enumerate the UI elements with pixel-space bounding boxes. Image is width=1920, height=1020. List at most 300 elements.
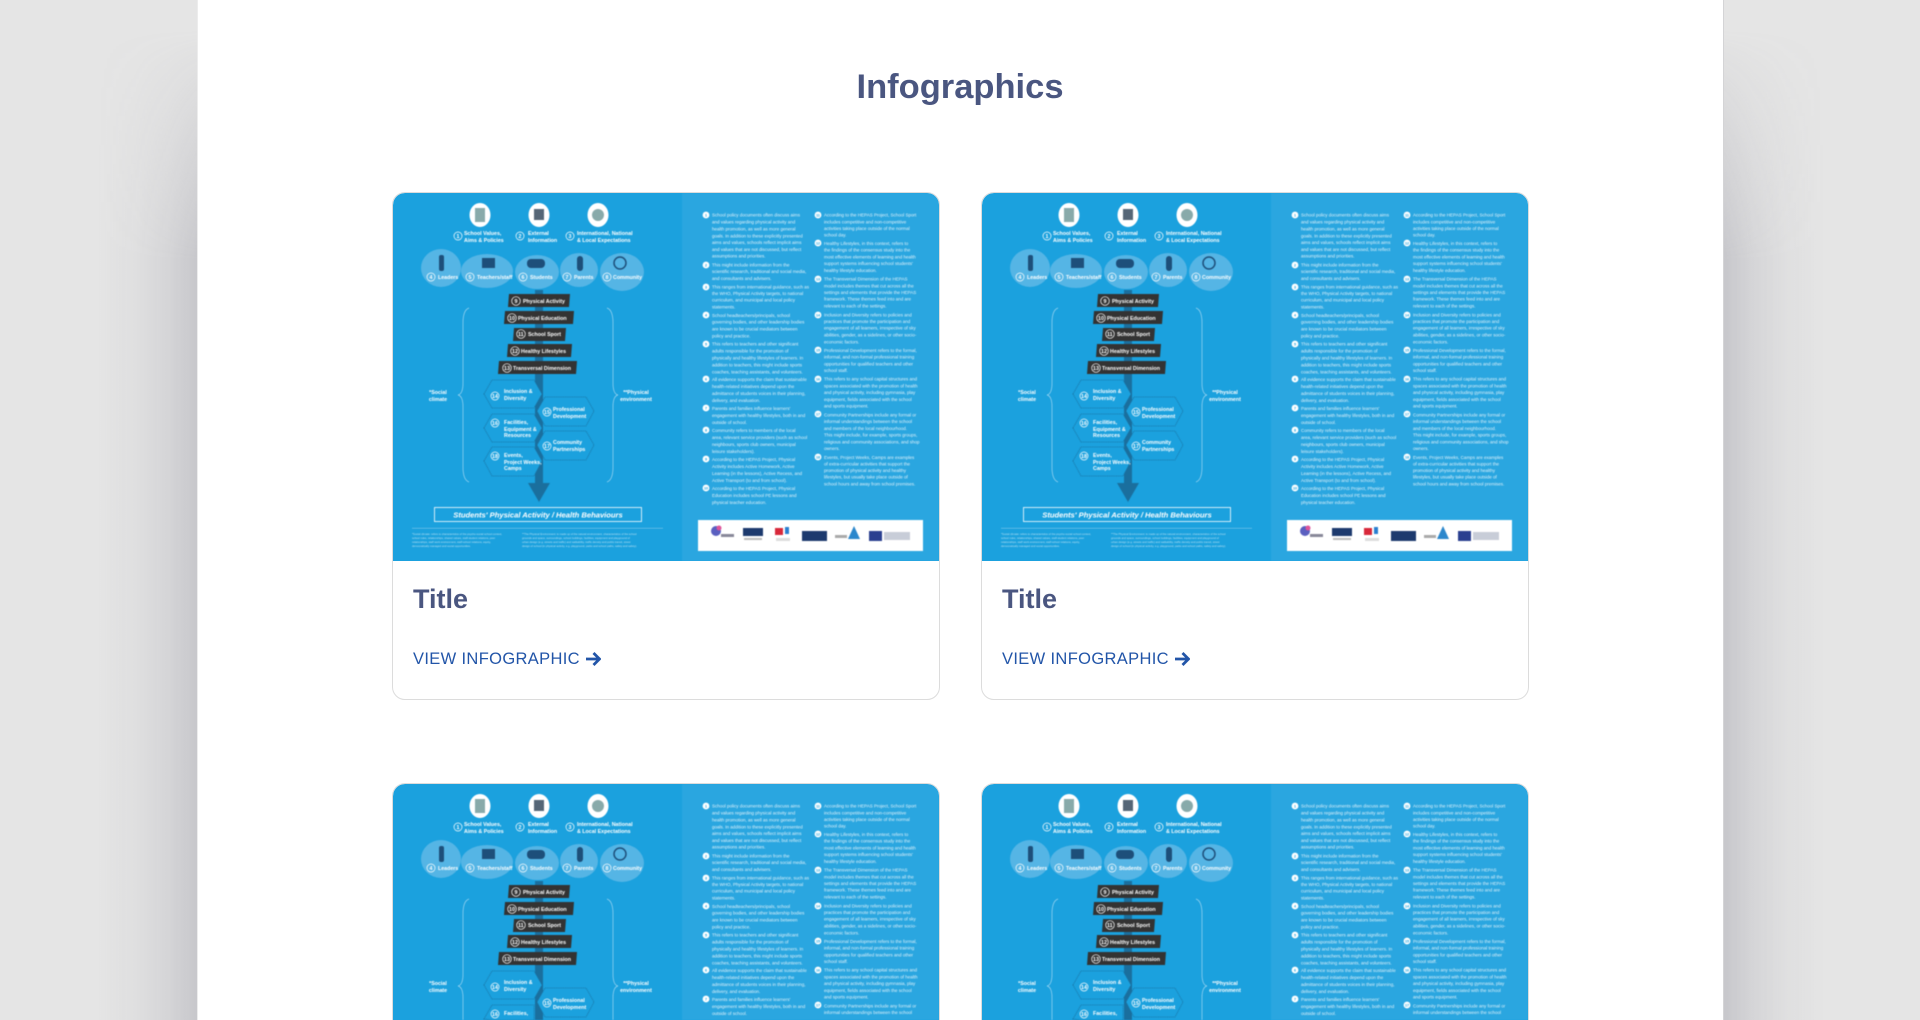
left page shadow [140, 88, 197, 1020]
infographic thumbnail: equipment, fields associated with the school [1413, 397, 1501, 402]
notes column 2: 16 [1405, 968, 1409, 972]
infographic thumbnail: of extra-curricular activities that support the [824, 461, 911, 466]
stakeholder blobs: Leaders [438, 866, 458, 872]
stakeholder blobs: Leaders [1027, 275, 1047, 281]
footnotes: relationships, staff work environment, staff-school relations, equity, [412, 540, 491, 544]
hexagons: Professional [1142, 998, 1174, 1004]
notes column 2: 14 [816, 313, 820, 317]
infographic thumbnail: relevant to each of the settings. [824, 304, 887, 309]
infographic thumbnail: The Transversal Dimension of the HEPAS [1413, 277, 1496, 282]
infographic thumbnail: The Transversal Dimension of the HEPAS [824, 277, 907, 282]
notes column 1: 8 [705, 428, 707, 432]
infographic thumbnail: and physical activity, including gymnasia, play [1413, 981, 1505, 986]
stakeholder blobs: Teachers/staff [1066, 866, 1102, 872]
infographic thumbnail: governing bodies, and other leadership bodies [712, 911, 805, 916]
infographic thumbnail: and values that are not discussed, but reflect [1301, 838, 1391, 843]
notes column 2: 11 [816, 213, 820, 217]
footnotes: **The Physical Environment: is made up of the natural environment, characteristics of the school [1111, 532, 1226, 536]
infographic thumbnail: statements. [1301, 896, 1324, 901]
hexagons [1073, 380, 1183, 476]
notes column 1: 2 [1294, 263, 1296, 267]
side labels and braces [429, 308, 652, 482]
infographic thumbnail: According to the HEPAS Project, Physical [1301, 486, 1384, 491]
footnotes: relationships, staff work environment, staff-school relations, equity, [1001, 540, 1080, 544]
infographic thumbnail: aims and values, schools reflect implicit aims [712, 240, 802, 245]
stakeholder blobs: 8 [1194, 866, 1198, 872]
top three factors: Information [1117, 829, 1146, 835]
hexagons: Development [1142, 414, 1175, 420]
notes column 2: 14 [1405, 313, 1409, 317]
infographic thumbnail: equipment, fields associated with the school [824, 988, 912, 993]
infographic thumbnail: abilities, gender, as a sidelines, or other socio- [824, 332, 917, 337]
hexagons: 18 [1081, 454, 1087, 460]
side labels and braces: environment [620, 397, 652, 403]
side labels and braces [429, 899, 652, 1020]
infographic thumbnail: practices that promote the participation and [824, 319, 911, 324]
hexagons: Diversity [1093, 396, 1115, 402]
notes column 2: 15 [816, 939, 820, 943]
infographic thumbnail: policy and practice. [1301, 924, 1340, 929]
notes column 1: 6 [705, 377, 707, 381]
infographic thumbnail: According to the HEPAS Project, School Sport [824, 213, 917, 218]
infographic thumbnail: physical teacher education. [1301, 500, 1356, 505]
infographic thumbnail: Inclusion and Diversity refers to policies and [824, 903, 912, 908]
infographic thumbnail: informal understandings between the school [1413, 1010, 1501, 1015]
infographic thumbnail: settings and elements that provide the HEPAS [824, 881, 916, 886]
stakeholder blobs: Community [613, 275, 642, 281]
infographic thumbnail: relevant to each of the settings. [1413, 895, 1476, 900]
infographic thumbnail: economic factors. [824, 930, 859, 935]
infographic thumbnail: relevant to each of the settings. [824, 895, 887, 900]
infographic thumbnail: assumptions and priorities. [712, 254, 766, 259]
infographic thumbnail: goals. In addition to these explicitly presented [1301, 233, 1392, 238]
infographic thumbnail: framework. These themes feed into and are [824, 888, 911, 893]
top three factors [1043, 203, 1222, 244]
infographic thumbnail: According to the HEPAS Project, School Sport [824, 804, 917, 809]
setting bars: Healthy Lifestyles [1110, 349, 1155, 355]
notes column 1: 3 [705, 285, 707, 289]
stakeholder blobs: Parents [1163, 275, 1182, 281]
infographic thumbnail: governing bodies, and other leadership bodies [1301, 320, 1394, 325]
infographic thumbnail: adults responsible for the promotion of [1301, 939, 1378, 944]
setting bars: 10 [509, 907, 515, 913]
notes column 1 [703, 803, 709, 1002]
infographic thumbnail: neighbours, sports club owners, municipal [712, 442, 796, 447]
setting bars: 11 [518, 332, 524, 338]
infographic thumbnail: coaches, teaching assistants, and volunteers. [1301, 369, 1392, 374]
footnotes: democratically managed and social opportunities. [1001, 544, 1060, 548]
infographic thumbnail: engagement with healthy lifestyles, both in and [712, 1004, 806, 1009]
top three factors: Information [528, 829, 557, 835]
footnotes: democratically managed and social opportunities. [412, 544, 471, 548]
stakeholder blobs: 7 [566, 275, 568, 281]
infographic thumbnail: Parents and families influence learners' [1301, 406, 1380, 411]
infographic thumbnail: adults responsible for the promotion of [1301, 348, 1378, 353]
infographic thumbnail: This refers to teachers and other significant [1301, 933, 1388, 938]
infographic thumbnail: admittance of students voices in their planning, [712, 982, 806, 987]
hexagons: Equipment & [504, 427, 537, 433]
infographic thumbnail: policy and practice. [712, 333, 751, 338]
footnotes: design of school (in physical activity, e.g. playground, parks and school paths, safety and safety). [1111, 544, 1226, 548]
outcome box: Students' Physical Activity / Health Behaviours [1042, 510, 1212, 520]
infographic thumbnail: This might include information from the [1301, 853, 1379, 858]
hexagons: Professional [553, 407, 585, 413]
top three factors: 3 [568, 234, 572, 240]
notes column 2 [1404, 803, 1410, 1008]
side labels and braces: *Social [1018, 981, 1036, 987]
setting bars [1087, 885, 1166, 965]
top three factors: External [1117, 231, 1138, 237]
infographic thumbnail: School headteachers/principals, school [1301, 904, 1379, 909]
infographic thumbnail: abilities, gender, as a sidelines, or other socio- [824, 923, 917, 928]
infographic thumbnail: most effective elements of learning and health [1413, 254, 1505, 259]
hexagons: Inclusion & [1093, 389, 1122, 395]
setting bars: 13 [1093, 957, 1099, 963]
setting bars: Transversal Dimension [513, 957, 571, 963]
hexagons [484, 380, 594, 476]
top three factors: & Local Expectations [1166, 238, 1220, 244]
hexagons: Camps [1093, 466, 1111, 472]
top three factors: Information [1117, 238, 1146, 244]
infographic thumbnail: informal understandings between the school [824, 419, 912, 424]
infographic thumbnail: aims and values, schools reflect implicit aims [712, 831, 802, 836]
footnotes: urban design (e.g. streets and traffic) and walkability, traffic density and public transit, street [522, 540, 631, 544]
infographic thumbnail: statements. [1301, 305, 1324, 310]
infographic thumbnail: the findings of the consensus study into the [1413, 248, 1500, 253]
top three factors: & Local Expectations [577, 238, 631, 244]
infographic thumbnail: health promotion, as well as more general [1301, 226, 1385, 231]
setting bars: 12 [512, 940, 518, 946]
infographic thumbnail: Professional Development refers to the formal, [1413, 939, 1506, 944]
notes column 2: 16 [1405, 377, 1409, 381]
notes column 2: 17 [816, 412, 820, 416]
top three factors: Aims & Policies [1053, 238, 1093, 244]
notes column 2: 12 [816, 241, 820, 245]
infographic thumbnail: Community refers to members of the local [1301, 428, 1385, 433]
notes column 2: 15 [1405, 939, 1409, 943]
setting bars: Healthy Lifestyles [521, 349, 566, 355]
notes column 1 [1292, 212, 1298, 491]
hexagons: Resources [504, 433, 531, 439]
infographic thumbnail: most effective elements of learning and health [1413, 845, 1505, 850]
infographic thumbnail: addition to teachers, this might include sports [1301, 953, 1392, 958]
setting bars: 11 [1107, 923, 1113, 929]
setting bars [498, 294, 577, 374]
infographic thumbnail: Healthy Lifestyles, in this context, refers to [1413, 241, 1498, 246]
hexagons: Community [1142, 440, 1171, 446]
setting bars: 13 [504, 366, 510, 372]
notes column 1: 7 [1294, 997, 1296, 1001]
side labels and braces: climate [429, 397, 447, 403]
infographic thumbnail [393, 784, 939, 1020]
top three factors: International, National [1166, 231, 1222, 237]
infographic thumbnail: equipment, fields associated with the school [1413, 988, 1501, 993]
notes column 1: 10 [704, 486, 708, 490]
infographic thumbnail: school day. [824, 824, 846, 829]
infographic thumbnail: and values that are not discussed, but reflect [712, 247, 802, 252]
infographic thumbnail: and sports equipment. [824, 995, 869, 1000]
infographic thumbnail: the findings of the consensus study into the [824, 248, 911, 253]
notes column 2: 11 [816, 804, 820, 808]
infographic thumbnail: activities taking place outside of the normal [1413, 226, 1499, 231]
infographic thumbnail: Active Transport (to and from school). [712, 478, 787, 483]
infographic thumbnail: Parents and families influence learners' [1301, 997, 1380, 1002]
top three factors: 1 [456, 234, 460, 240]
infographic thumbnail: health promotion, as well as more general [712, 817, 796, 822]
hexagons: Professional [553, 998, 585, 1004]
notes column 1: 7 [1294, 406, 1296, 410]
stakeholder blobs: 8 [606, 866, 608, 872]
setting bars: 10 [1098, 907, 1104, 913]
stakeholder blobs: 7 [1154, 275, 1158, 281]
card title: Title [1002, 584, 1057, 614]
hexagons: Diversity [1093, 987, 1115, 993]
infographic thumbnail: Community Partnerships include any formal or [824, 1003, 917, 1008]
infographic thumbnail: Inclusion and Diversity refers to policies and [1413, 903, 1501, 908]
infographic thumbnail: Healthy Lifestyles, in this context, refers to [824, 241, 909, 246]
infographic thumbnail: curriculum, and municipal and local policy [1301, 298, 1385, 303]
infographic thumbnail: school staff. [824, 368, 848, 373]
infographic thumbnail: governing bodies, and other leadership bodies [712, 320, 805, 325]
infographic thumbnail: According to the HEPAS Project, Physical [1301, 457, 1384, 462]
setting bars [498, 885, 577, 965]
footnotes [412, 528, 663, 548]
infographic thumbnail: This ranges from international guidance, such as [712, 875, 810, 880]
notes column 2 [815, 212, 821, 460]
stakeholder blobs: 7 [566, 866, 568, 872]
infographic thumbnail: addition to teachers, this might include sports [1301, 362, 1392, 367]
notes column 1: 6 [705, 968, 707, 972]
infographic thumbnail: informal, and non-formal professional training [824, 355, 915, 360]
outcome box [434, 508, 642, 522]
notes column 2: 13 [1405, 868, 1409, 872]
infographic thumbnail: school staff. [824, 959, 848, 964]
setting bars: Physical Activity [523, 890, 565, 896]
outcome box [1024, 508, 1230, 522]
infographic thumbnail: and physical activity, including gymnasia, play [1413, 390, 1505, 395]
side labels and braces: *Social [1018, 390, 1036, 396]
infographic thumbnail: physically and healthy lifestyles of learners. In [712, 946, 804, 951]
hexagons: 16 [492, 1012, 498, 1018]
infographic thumbnail: outside of school. [1301, 1011, 1336, 1016]
partner logos [1287, 520, 1512, 551]
top three factors: External [1117, 822, 1138, 828]
hexagons: Events, [1093, 453, 1112, 459]
setting bars: 10 [1098, 316, 1104, 322]
top three factors: 2 [1108, 234, 1110, 240]
stakeholder blobs: 4 [1018, 866, 1022, 872]
right page shadow [1724, 88, 1780, 1020]
side labels and braces: climate [429, 988, 447, 994]
setting bars: Physical Education [518, 316, 567, 322]
notes column 2: 12 [816, 832, 820, 836]
hexagons: Diversity [504, 987, 526, 993]
infographic thumbnail: governing bodies, and other leadership bodies [1301, 911, 1394, 916]
setting bars: 9 [514, 299, 518, 305]
infographic thumbnail: and consultants and advisers. [712, 867, 772, 872]
infographic thumbnail: assumptions and priorities. [712, 845, 766, 850]
notes column 1: 3 [1294, 285, 1296, 289]
setting bars: 9 [1104, 299, 1106, 305]
card 2 [981, 192, 1529, 700]
top three factors: & Local Expectations [1166, 829, 1220, 835]
infographic thumbnail: Inclusion and Diversity refers to policies and [1413, 312, 1501, 317]
side labels and braces: **Physical [623, 981, 649, 987]
infographic thumbnail: Education includes school PE lessons and [712, 493, 797, 498]
setting bars: School Sport [1117, 332, 1150, 338]
setting bars: Physical Activity [1112, 890, 1154, 896]
notes column 1 [1292, 803, 1298, 1002]
setting bars: 11 [518, 923, 524, 929]
infographic thumbnail: school day. [824, 233, 846, 238]
hexagons: 15 [1133, 1001, 1139, 1007]
notes column 2: 17 [1405, 412, 1409, 416]
notes column 1 [703, 212, 709, 491]
notes column 1: 10 [1293, 486, 1297, 490]
infographic thumbnail: coaches, teaching assistants, and volunteers. [1301, 960, 1392, 965]
infographic thumbnail: and consultants and advisers. [712, 276, 772, 281]
infographic thumbnail: curriculum, and municipal and local policy [712, 889, 796, 894]
infographic thumbnail: includes competitive and non-competitive [824, 219, 907, 224]
notes column 2: 17 [816, 1003, 820, 1007]
infographic thumbnail: economic factors. [1413, 339, 1448, 344]
infographic thumbnail: model includes themes that cut across all the [1413, 874, 1503, 879]
infographic thumbnail: All evidence supports the claim that sustainable [1301, 377, 1396, 382]
infographic thumbnail: School headteachers/principals, school [1301, 313, 1379, 318]
hexagons: 18 [492, 454, 498, 460]
infographic thumbnail: scientific research, traditional and social media, [1301, 269, 1395, 274]
infographic thumbnail: healthy lifestyle education. [1413, 268, 1466, 273]
infographic thumbnail: are known to be crucial mediators between [1301, 327, 1387, 332]
infographic thumbnail: and consultants and advisers. [1301, 276, 1361, 281]
infographic thumbnail: owners. [1413, 446, 1429, 451]
notes column 2: 18 [816, 455, 820, 459]
infographic thumbnail: scientific research, traditional and social media, [712, 269, 806, 274]
stakeholder blobs: Parents [574, 866, 593, 872]
infographic thumbnail: and physical activity, including gymnasia, play [824, 981, 916, 986]
infographic thumbnail: This ranges from international guidance, such as [1301, 284, 1399, 289]
footnotes: *Social climate: refers to characteristics of the psycho-social school context, [412, 532, 502, 536]
infographic thumbnail: goals. In addition to these explicitly presented [712, 233, 803, 238]
infographic thumbnail: health-related initiatives depend upon the [712, 975, 795, 980]
infographic thumbnail: model includes themes that cut across all the [824, 283, 914, 288]
setting bars: 13 [1093, 366, 1099, 372]
stakeholder blobs: Community [1202, 866, 1231, 872]
infographic thumbnail: Community Partnerships include any formal or [824, 412, 917, 417]
infographic thumbnail: lifestyles, but usually take place outside of [824, 475, 909, 480]
infographic thumbnail: adults responsible for the promotion of [712, 348, 789, 353]
infographic thumbnail: Community refers to members of the local [712, 428, 796, 433]
infographic thumbnail: framework. These themes feed into and are [1413, 297, 1500, 302]
title: Infographics [856, 68, 1064, 106]
footnotes: school rules, relationships, shared values, staff-student relations, peer [1001, 536, 1084, 540]
infographic thumbnail: statements. [712, 305, 735, 310]
top three factors: 1 [1046, 825, 1048, 831]
infographic thumbnail: and values regarding physical activity and [712, 220, 796, 225]
hexagons [484, 971, 594, 1020]
infographic thumbnail: support systems influencing school students' [1413, 852, 1502, 857]
infographic thumbnail: engagement with healthy lifestyles, both in and [712, 413, 806, 418]
infographic thumbnail: Community Partnerships include any formal or [1413, 412, 1506, 417]
infographic thumbnail: abilities, gender, as a sidelines, or other socio- [1413, 332, 1506, 337]
hexagons: Project Weeks, [504, 460, 542, 466]
infographic thumbnail [982, 193, 1528, 561]
stakeholder blobs: 5 [468, 275, 472, 281]
side labels and braces: **Physical [1212, 390, 1238, 396]
setting bars: 10 [509, 316, 515, 322]
stakeholder blobs: Community [613, 866, 642, 872]
side labels and braces: climate [1018, 988, 1036, 994]
stakeholder blobs: Community [1202, 275, 1231, 281]
infographic thumbnail: framework. These themes feed into and are [824, 297, 911, 302]
infographic thumbnail: engagement of all learners, irrespective of sky [1413, 326, 1506, 331]
hexagons: 15 [1133, 410, 1139, 416]
infographic thumbnail: leisure stakeholders). [1301, 449, 1344, 454]
infographic thumbnail: and members of the local neighbourhood. [1413, 426, 1496, 431]
setting bars: 12 [1101, 349, 1107, 355]
hexagons: Community [553, 440, 582, 446]
infographic thumbnail: area, relevant service providers (such as school [712, 435, 807, 440]
setting bars: Physical Education [1107, 316, 1156, 322]
hexagons: Inclusion & [504, 389, 533, 395]
top three factors: 3 [1158, 234, 1160, 240]
stakeholder blobs: 4 [430, 275, 432, 281]
infographic thumbnail: Inclusion and Diversity refers to policies and [824, 312, 912, 317]
infographic thumbnail: School policy documents often discuss aims [1301, 213, 1390, 218]
side labels and braces [1018, 308, 1241, 482]
infographic thumbnail: According to the HEPAS Project, School Sport [1413, 213, 1506, 218]
notes column 2: 16 [816, 377, 820, 381]
infographic thumbnail: health-related initiatives depend upon the [712, 384, 795, 389]
infographic thumbnail: addition to teachers, this might include sports [712, 362, 803, 367]
stakeholder blobs [1010, 840, 1233, 882]
infographic thumbnail: religious and community associations, and shop [1413, 439, 1509, 444]
infographic thumbnail: Healthy Lifestyles, in this context, refers to [824, 832, 909, 837]
stakeholder blobs: Leaders [1027, 866, 1047, 872]
top three factors: External [528, 231, 549, 237]
top three factors: School Values, [1053, 231, 1091, 237]
side labels and braces: **Physical [1212, 981, 1238, 987]
setting bars: 11 [1107, 332, 1113, 338]
hexagons: Facilities, [504, 1011, 529, 1017]
side labels and braces: climate [1018, 397, 1036, 403]
setting bars: Transversal Dimension [1102, 366, 1160, 372]
notes column 2: 13 [816, 868, 820, 872]
infographic thumbnail: aims and values, schools reflect implicit aims [1301, 831, 1391, 836]
infographic thumbnail: and values regarding physical activity and [712, 811, 796, 816]
infographic thumbnail: outside of school. [712, 420, 747, 425]
top three factors: School Values, [464, 231, 502, 237]
hexagons: Facilities, [1093, 420, 1118, 426]
top three factors: Aims & Policies [464, 238, 504, 244]
hexagons: Partnerships [1142, 447, 1174, 453]
setting bars: Physical Activity [523, 299, 565, 305]
infographic thumbnail: the WHO, Physical Activity targets, to national [1301, 291, 1392, 296]
side labels and braces: environment [1209, 397, 1241, 403]
stakeholder blobs: 7 [1154, 866, 1158, 872]
notes column 2 [1404, 212, 1410, 460]
hexagons: 17 [544, 444, 550, 450]
infographic thumbnail: owners. [824, 446, 840, 451]
infographic thumbnail: engagement of all learners, irrespective of sky [824, 326, 917, 331]
notes column 2: 15 [816, 348, 820, 352]
infographic thumbnail: scientific research, traditional and social media, [712, 860, 806, 865]
setting bars [1087, 294, 1166, 374]
infographic thumbnail: Parents and families influence learners' [712, 406, 791, 411]
infographic thumbnail: opportunities for qualified teachers and other [824, 952, 914, 957]
infographic thumbnail: Activity includes Active Homework, Active [1301, 464, 1384, 469]
top three factors: & Local Expectations [577, 829, 631, 835]
